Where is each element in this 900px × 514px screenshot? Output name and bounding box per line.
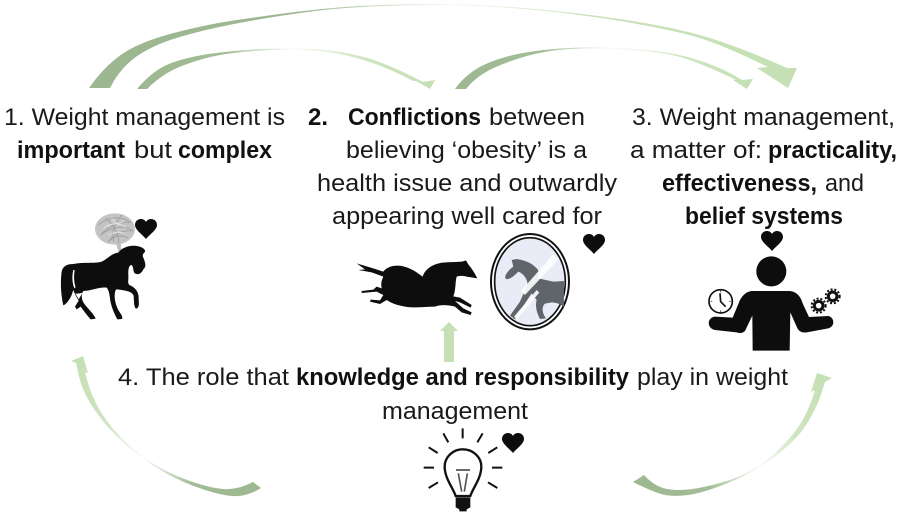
mirror glare stripes [514,254,558,319]
theme 3 text: practicality, [768,137,897,164]
mirror frame [491,234,569,329]
theme 2 text [308,104,618,230]
arrow: large arc from theme 1 to theme 3 [89,4,797,88]
theme 2 text: Conflictions [348,104,481,131]
scribble thought cloud [95,213,135,253]
arrow: arc from theme 2 to theme 3 [455,47,753,89]
arrow: arc from theme 1 to theme 2 [137,48,435,89]
reflected horse [505,259,564,319]
theme 2 text: between [489,104,585,131]
icon: heart theme 2 [583,234,605,254]
icon: oval mirror with lean horse reflection [491,234,569,329]
theme 2 text: believing ‘obesity’ is a [346,137,587,164]
arrow: theme 4 up to theme 2 [440,322,458,362]
theme 4 text: management [382,398,528,425]
theme 3 text: and [825,170,864,197]
theme 3 text: a matter of: [630,137,762,164]
icon: heart theme 1 [135,219,157,239]
theme 2 text: health issue and outwardly [317,170,618,197]
theme 2 text: 2. [308,104,328,131]
theme 3 text: belief systems [685,203,843,230]
theme 4 text: knowledge and responsibility [296,364,629,391]
icon: horse with tangled thought [61,213,145,319]
theme 1 text [4,104,285,164]
icon: heart theme 4 [502,433,524,453]
theme 4 text: play in weight [637,364,788,391]
theme 4 text: 4. The role that [118,364,289,391]
theme 2 text: appearing well cared for [332,203,602,230]
theme 3 text: effectiveness, [662,170,817,197]
clock [709,290,732,313]
person [709,256,833,351]
theme 1 text: 1. Weight management is [4,104,285,131]
icon: overweight horse [357,260,477,315]
icon: light bulb [424,428,502,511]
theme 4 text [118,364,788,425]
arrow: theme 4 to theme 3 [633,373,832,496]
theme 1 text: but [134,137,172,164]
gears [812,289,840,313]
horse silhouette [61,246,145,319]
icon: person balancing clock and gears [709,256,840,351]
arrow: theme 4 to theme 1 [71,356,261,496]
theme 1 text: complex [178,137,272,164]
theme 1 text: important [17,137,125,164]
theme 3 text: 3. Weight management, [632,104,895,131]
theme 3 text [630,104,897,230]
icon: heart theme 3 [761,231,783,251]
